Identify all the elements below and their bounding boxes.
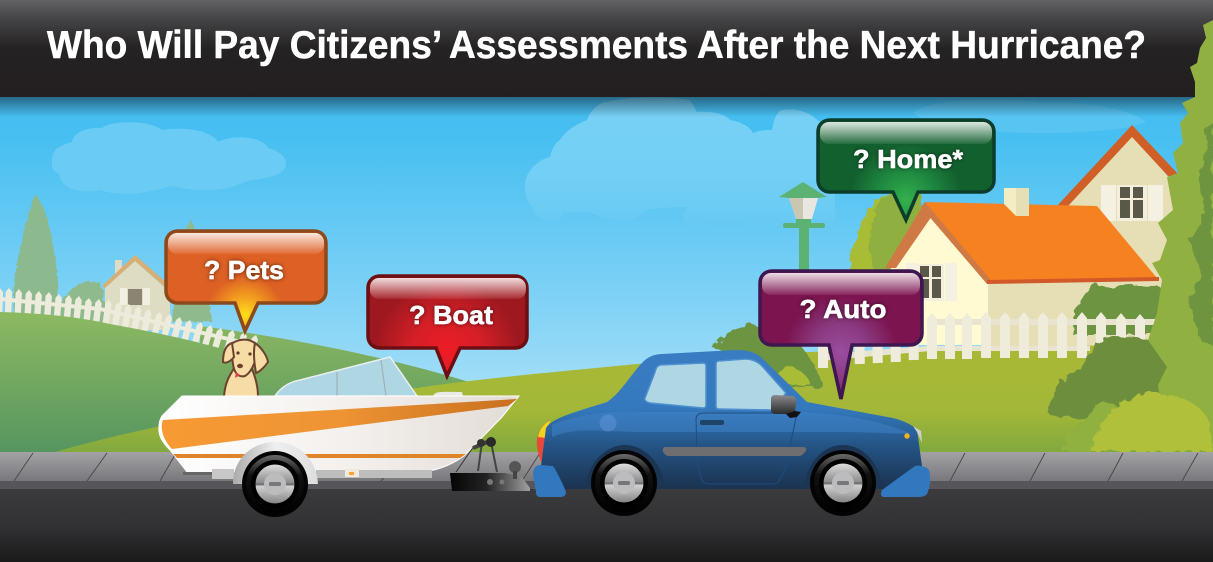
car body xyxy=(541,350,922,489)
icon: mid bush xyxy=(1063,403,1140,452)
side trim xyxy=(663,447,806,456)
icon: hedge xyxy=(1148,20,1213,456)
icon: light bush xyxy=(1092,392,1213,452)
clouds xyxy=(52,97,1146,229)
bubble text: ? Pets xyxy=(204,255,284,285)
car xyxy=(533,350,930,516)
icon: boat hull xyxy=(159,396,519,472)
icon: background shrub xyxy=(62,282,110,325)
shadow below header xyxy=(0,97,1213,117)
bush behind car xyxy=(712,325,822,388)
bubble text: ? Boat xyxy=(409,300,493,330)
foreground bushes and hedge xyxy=(1050,20,1213,456)
icon: rear bumper xyxy=(533,465,566,497)
icon: front bumper xyxy=(881,466,930,497)
title: Who Will Pay Citizens’ Assessments After the Next Hurricane? xyxy=(47,24,1146,67)
right picket fence xyxy=(818,312,1163,368)
bush behind home xyxy=(848,190,930,280)
icon: side mirror xyxy=(771,395,801,418)
back green hill xyxy=(200,326,500,455)
icon: rear window xyxy=(645,363,706,408)
callout: Home xyxy=(818,120,994,220)
orange stripe xyxy=(162,399,517,449)
front house xyxy=(885,188,1160,350)
header band xyxy=(0,0,1213,97)
icon: chimney xyxy=(1004,188,1029,216)
dark bush behind fence xyxy=(1073,285,1165,335)
trailer wheel xyxy=(242,451,308,517)
icon: tail light xyxy=(537,420,550,463)
bubble text: ? Home* xyxy=(853,144,964,174)
front green hill xyxy=(0,312,300,455)
bubble text: ? Auto xyxy=(800,294,886,324)
trailer frame xyxy=(183,437,497,479)
olive lawn xyxy=(55,342,1213,455)
street lamp xyxy=(779,182,827,275)
icon: background tree xyxy=(172,220,212,322)
lower stripe xyxy=(173,454,466,458)
header hedge overlap xyxy=(1190,20,1213,100)
icon: small house xyxy=(102,255,177,330)
road xyxy=(0,489,1213,562)
icon: boat windshield xyxy=(275,357,463,396)
trailer hitch xyxy=(450,461,530,491)
icon: dark green bush xyxy=(1050,336,1170,421)
icon: fuel cap xyxy=(600,414,616,432)
icon: dog xyxy=(223,340,268,397)
callout: Auto xyxy=(760,271,922,399)
roof highlight xyxy=(552,412,912,437)
rear house xyxy=(1057,125,1180,300)
callout: Boat xyxy=(368,276,527,376)
boat on trailer xyxy=(159,340,530,517)
left picket fence xyxy=(0,288,259,366)
icon: indicator xyxy=(904,433,910,439)
left distant scene: tree and house xyxy=(14,195,212,330)
wheel arches xyxy=(586,445,665,489)
car wheels xyxy=(591,450,657,516)
icon: hedge shadow xyxy=(1188,115,1213,345)
fender xyxy=(233,442,318,484)
sky background xyxy=(0,95,1213,455)
icon: door handle xyxy=(700,420,724,425)
icon: door outline xyxy=(696,413,797,484)
sidewalk and curb xyxy=(0,452,1213,489)
icon: cypress tree xyxy=(14,195,58,320)
icon: front window xyxy=(716,359,786,410)
callout: Pets xyxy=(166,231,326,331)
